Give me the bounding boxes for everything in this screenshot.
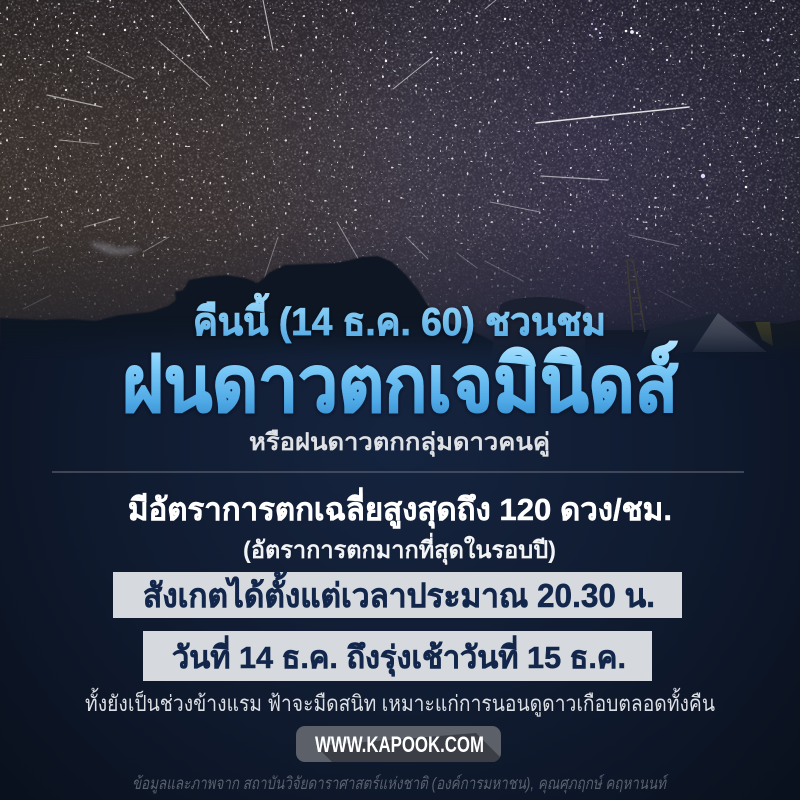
text: viewing conditions: ทั้งยังเป็นช่วงข้างแรม ฟ้าจะมืดสนิท เหมาะแก่การนอนดูดาวเกือบตลอดทั้งคืน (85, 688, 715, 717)
source credit: ข้อมูลและภาพจาก สถาบันวิจัยดาราศาสตร์แห่งชาติ (องค์การมหาชน), คุณศุภฤกษ์ คฤหานนท์ (132, 774, 669, 794)
note: highest of the year: (อัตราการตกมากที่สุดในรอบปี) (243, 532, 556, 566)
star cluster and bright stars (65, 18, 769, 188)
banner: date range (143, 631, 652, 681)
lower navy panel (32, 325, 773, 776)
website badge (296, 726, 505, 762)
main title: ฝนดาวตกเจมินิดส์ (122, 340, 678, 428)
subtitle: หรือฝนดาวตกกลุ่มดาวคนคู่ (249, 429, 550, 458)
website badge: WWW.KAPOOK.COM (315, 732, 484, 757)
fade of sky toward the horizon (0, 0, 800, 345)
banner: observation start time: สังเกตได้ตั้งแต่เวลาประมาณ 20.30 น. (143, 571, 655, 614)
background: night sky (0, 0, 800, 345)
heading line: tonight, invitation: คืนนี้ (14 ธ.ค. 60) ชวนชม (193, 293, 606, 344)
banner: date range: วันที่ 14 ธ.ค. ถึงรุ่งเช้าวันที่ 15 ธ.ค. (172, 635, 626, 677)
statistic line: peak rate: มีอัตราการตกเฉลี่ยสูงสุดถึง 120 ดวง/ชม. (128, 487, 672, 529)
meteors (0, 0, 691, 309)
landscape silhouette: trees, building, antenna, tent (0, 256, 800, 360)
cloud wisp (89, 243, 140, 255)
